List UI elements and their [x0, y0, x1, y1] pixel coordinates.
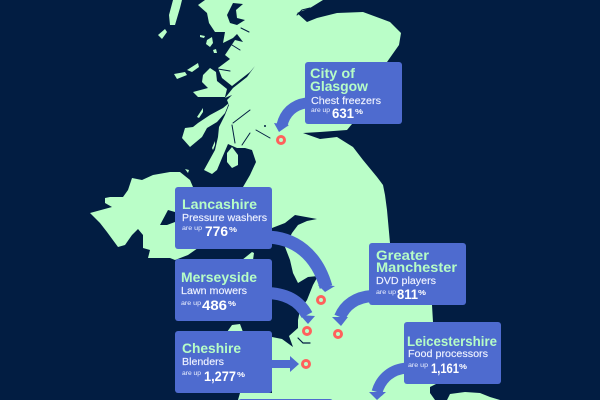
panel: Lancashire: are up [182, 226, 203, 232]
panel: Merseyside [175, 259, 272, 321]
panel: Lancashire: Lancashire [182, 196, 257, 212]
panel: Greater Manchester: are up [376, 290, 397, 296]
panel: Leicestershire: Food processors [408, 349, 488, 360]
panel: Leicestershire [404, 322, 501, 384]
panel: City of Glasgow: City of [310, 65, 355, 81]
panel: City of Glasgow: % [355, 109, 364, 116]
map of the UK [90, 0, 500, 400]
marker: Glasgow [278, 136, 284, 144]
panel: City of Glasgow: Glasgow [310, 78, 368, 94]
panel: Cheshire: Cheshire [182, 340, 241, 356]
panel: Cheshire: 1,277 [204, 369, 236, 384]
arrow: Greater Manchester [332, 296, 372, 326]
panel: Greater Manchester: Manchester [376, 259, 458, 275]
arrow: Cheshire [271, 356, 299, 372]
panel: Lancashire: 776 [205, 224, 228, 239]
panel: Merseyside: 486 [202, 298, 228, 313]
marker: Cheshire [302, 360, 310, 368]
panel: Merseyside: % [228, 301, 237, 308]
panel: Lancashire: % [229, 227, 238, 234]
map: Lough Neagh [160, 210, 175, 225]
marker: Lancashire [318, 296, 324, 304]
panel: Cheshire: % [237, 372, 246, 379]
map: Anglesey [227, 324, 243, 332]
panel: City of Glasgow: Chest freezers [311, 96, 381, 107]
panel: Leicestershire: 1,161 [431, 361, 459, 376]
marker: Greater Manchester [334, 330, 342, 338]
panel: Leicestershire: % [459, 364, 468, 371]
panel: Leicestershire: Leicestershire [407, 333, 497, 349]
panel: Merseyside: Merseyside [181, 269, 257, 285]
arrow: Glasgow [274, 103, 306, 132]
panel: Cheshire [175, 331, 272, 393]
panel: Merseyside: Lawn mowers [181, 286, 247, 297]
panel: Leicestershire: are up [408, 363, 429, 369]
arrow: Leicestershire [369, 368, 407, 400]
panel: City of Glasgow: 631 [332, 106, 354, 121]
panel: Greater Manchester [369, 243, 466, 305]
panel: City of Glasgow [305, 62, 402, 124]
map: Great Britain mainland [198, 0, 438, 400]
map: inland water details [218, 3, 310, 343]
panel: Cheshire: Blenders [182, 357, 224, 368]
panel: Greater Manchester: % [418, 290, 427, 297]
panel: Greater Manchester: Greater [376, 247, 430, 263]
marker: Merseyside [304, 328, 310, 334]
panel: Cheshire: are up [182, 371, 202, 377]
arrow: Lancashire [265, 237, 335, 292]
panel: cropped bottom box [238, 399, 333, 400]
map: Ireland [90, 172, 200, 260]
map: Norfolk coast [447, 392, 500, 400]
panel: Lancashire [175, 187, 272, 249]
panel: Merseyside: are up [181, 301, 202, 307]
map: Hebrides and western islands [158, 0, 238, 173]
panel: Greater Manchester: DVD players [376, 276, 436, 287]
panel: Greater Manchester: 811 [397, 287, 418, 302]
panel: City of Glasgow: are up [311, 108, 331, 114]
arrow: Merseyside [265, 293, 315, 324]
map: Isle of Man [242, 252, 254, 260]
panel: Lancashire: Pressure washers [182, 213, 267, 224]
